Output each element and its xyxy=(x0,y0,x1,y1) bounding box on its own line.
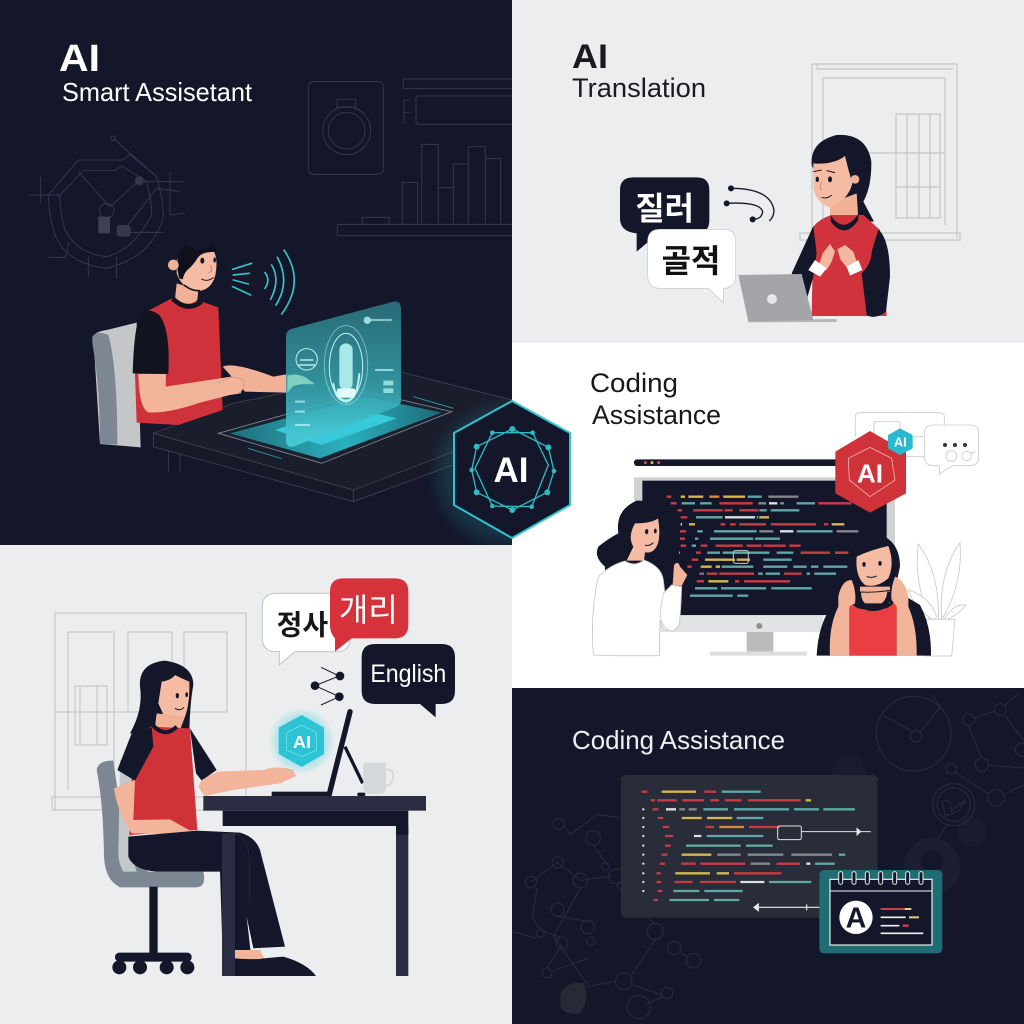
red AI hexagon xyxy=(835,431,906,513)
titles: AI xyxy=(59,38,100,80)
panel: coding assistance dark xyxy=(512,688,1024,1024)
speech bubble red xyxy=(330,578,408,652)
speech bubble dark: 질러 xyxy=(635,190,694,226)
small teal AI hexagon: AI xyxy=(894,436,907,450)
panel: coding assistance light xyxy=(512,343,1024,688)
speech bubble dark xyxy=(620,177,709,252)
speech bubble white: 골적 xyxy=(662,243,720,279)
illustration: code monitor and two people xyxy=(592,413,979,656)
person xyxy=(133,242,315,425)
plant xyxy=(908,543,966,656)
chat dots xyxy=(943,443,967,447)
glowing mat xyxy=(230,397,442,458)
chair xyxy=(92,323,141,447)
central AI hexagon badge xyxy=(434,400,571,545)
laptop xyxy=(738,274,837,322)
small teal AI hexagon xyxy=(888,428,913,455)
speech bubble white: 정사 xyxy=(277,609,328,640)
holographic screen xyxy=(286,301,401,447)
title xyxy=(572,38,706,103)
AI hexagon glow xyxy=(268,708,335,774)
highlight box with arrow xyxy=(778,826,871,840)
connector icon xyxy=(311,667,344,705)
title: Assistance xyxy=(592,400,721,430)
title xyxy=(590,368,721,430)
title: Translation xyxy=(572,73,706,103)
AI card xyxy=(819,870,942,953)
background outlines xyxy=(855,413,979,474)
window line art xyxy=(52,613,246,810)
background network xyxy=(512,693,1024,1019)
title: Coding Assistance xyxy=(572,725,785,755)
double arrow xyxy=(754,904,822,911)
monitor xyxy=(634,459,895,656)
woman xyxy=(792,135,890,317)
title: Coding xyxy=(590,368,678,398)
code panel xyxy=(621,775,878,918)
speech bubble white xyxy=(262,593,350,665)
woman xyxy=(114,661,316,976)
desk xyxy=(153,370,512,502)
code lines xyxy=(642,792,855,900)
code lines xyxy=(667,497,858,596)
speech bubble white xyxy=(648,229,736,303)
chair xyxy=(97,760,204,974)
illustration: person at holographic desk xyxy=(92,242,512,502)
panel: translation at desk xyxy=(0,545,512,1024)
tablet on desk xyxy=(272,712,365,796)
sound waves xyxy=(233,250,294,314)
woman with red shirt xyxy=(817,533,931,656)
illustration: translation bubbles and woman xyxy=(620,135,890,322)
speech bubble English xyxy=(362,644,455,717)
titles xyxy=(59,38,253,107)
desk leg front xyxy=(222,833,249,976)
central AI hexagon badge: AI xyxy=(494,451,528,490)
illustration: code panel and card xyxy=(621,775,942,953)
titles: Smart Assisetant xyxy=(62,77,253,107)
window line art xyxy=(800,64,960,240)
AI card: A xyxy=(846,903,866,935)
illustration: woman at desk with bubbles xyxy=(97,578,455,976)
speech bubble red: 개리 xyxy=(339,592,398,628)
background line art xyxy=(29,79,512,278)
desk top xyxy=(203,796,426,811)
woman pointing xyxy=(592,501,687,656)
panel: smart assistant xyxy=(0,0,512,545)
title: AI xyxy=(572,38,608,76)
network ring xyxy=(469,426,556,513)
AI hexagon glow: AI xyxy=(293,732,311,752)
red AI hexagon: AI xyxy=(857,458,883,488)
desk xyxy=(223,811,408,976)
speech bubble English: English xyxy=(370,661,446,688)
translation connectors xyxy=(724,185,774,222)
panel: translation xyxy=(512,0,1024,343)
mug xyxy=(363,763,393,794)
